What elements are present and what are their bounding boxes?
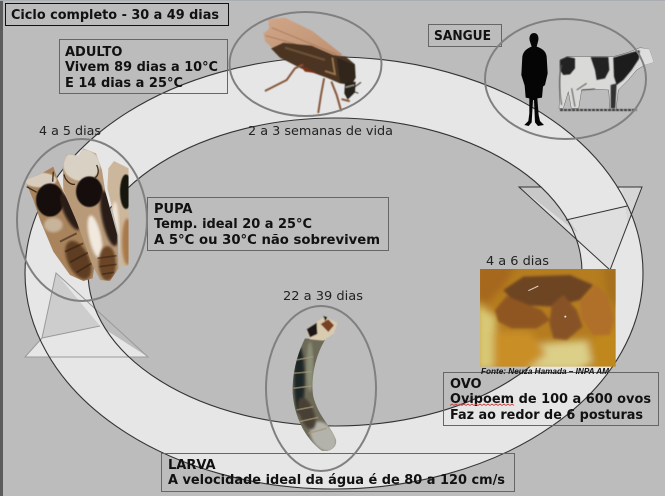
panel: blood: SANGUE [434,29,491,44]
panel: pupa [148,198,388,250]
heading: complete cycle: Ciclo completo - 30 a 49 dias [11,8,219,23]
pupa: right [107,161,129,266]
ellipse: blood hosts [485,19,646,139]
label: adult duration: 2 a 3 semanas de vida [248,123,393,138]
pupa: left [23,165,97,283]
panel: adult: ADULTO [65,45,122,60]
photo: eggs [480,269,616,367]
ellipse: adult [230,12,382,116]
panel: larva [162,454,514,492]
ellipse: pupa [17,139,147,301]
arrow: left arrowhead [25,273,148,357]
panel: pupa: A 5°C ou 30°C não sobrevivem [154,233,380,248]
icon: cow [559,48,654,110]
panel: larva: A velocidade ideal da água é de 80 a 120 cm/s [168,473,505,488]
heading: complete cycle [6,4,228,26]
panel: larva: LARVA [168,458,216,473]
label: egg duration: 4 a 6 dias [486,253,549,268]
panel: egg [444,372,658,426]
panel: egg: OVO [450,377,482,392]
panel: egg: Ovipoem de 100 a 600 ovos [450,392,651,407]
panel: adult: E 14 dias a 25°C [65,76,183,91]
photo: larva [292,316,338,451]
arrow: right arrowhead [518,186,643,269]
panel: adult [60,40,228,94]
photo credit: Fonte: Neuza Hamada – INPA AM [481,367,609,376]
panel: pupa: Temp. ideal 20 a 25°C [154,217,312,232]
label: larva duration: 22 a 39 dias [283,288,363,303]
panel: blood [428,24,502,46]
photo: adult fly [263,18,361,112]
icon: human silhouette [521,33,548,126]
panel: pupa: PUPA [154,202,192,217]
pupa: middle [62,148,118,281]
label: pupa duration: 4 a 5 dias [39,123,101,138]
ellipse: larva [266,306,376,471]
panel: adult: Vivem 89 dias a 10°C [65,60,218,75]
panel: egg: Faz ao redor de 6 posturas [450,408,643,423]
photo: pupae [23,147,133,283]
